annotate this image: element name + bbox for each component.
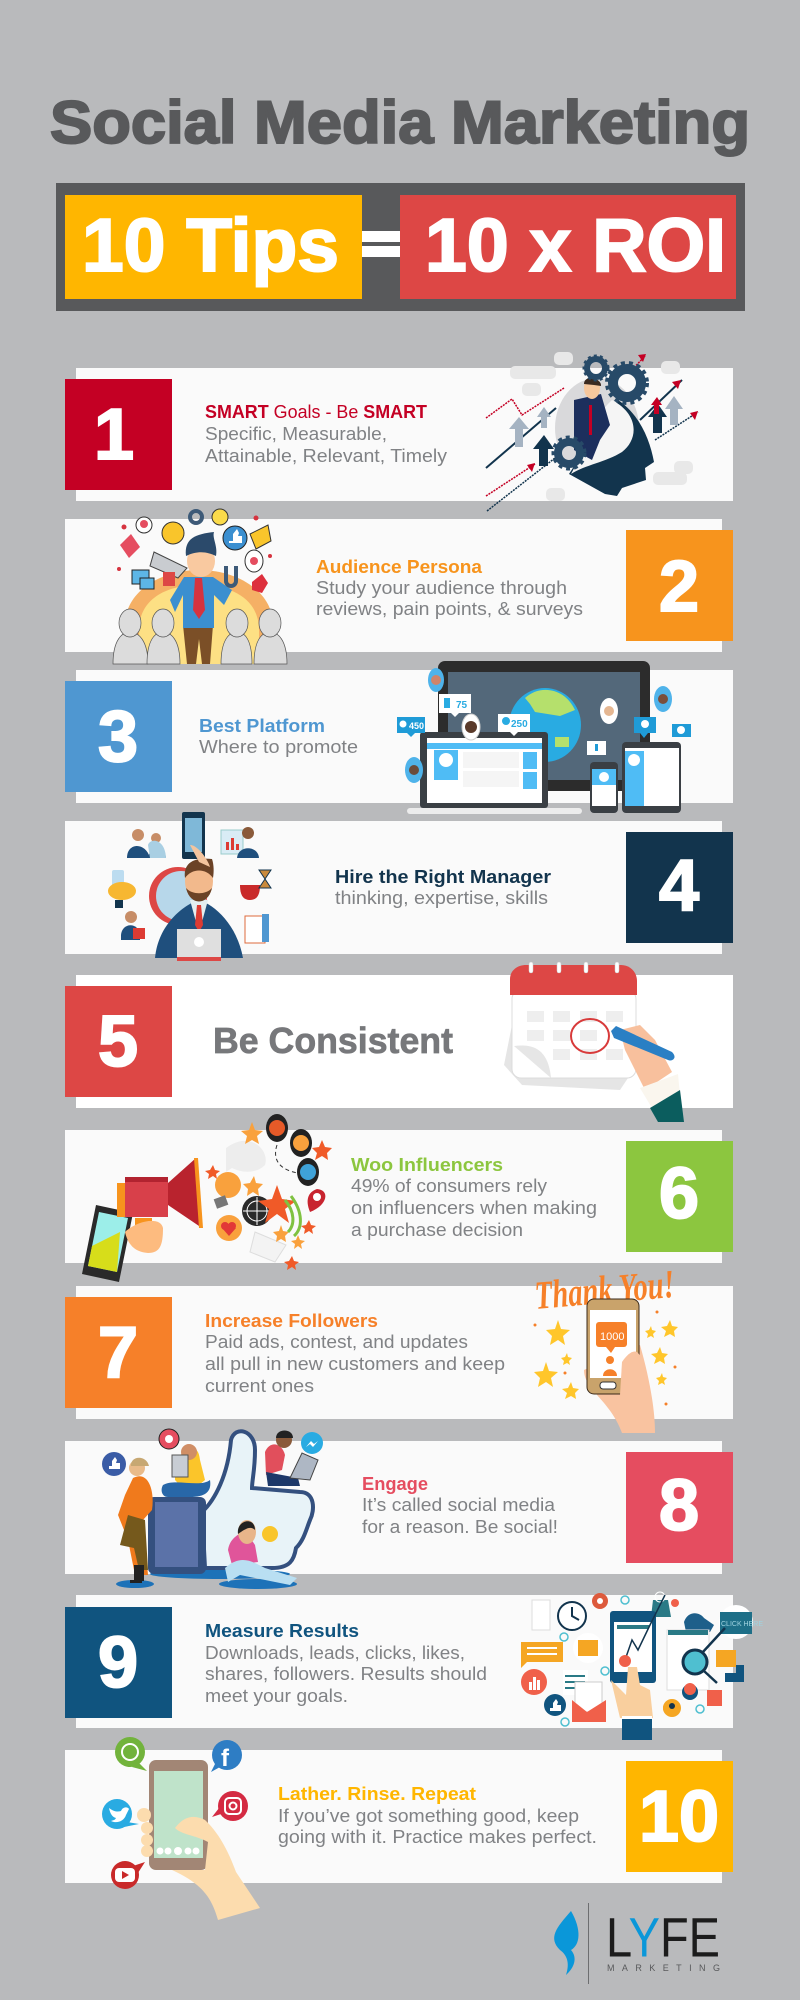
facebook bubble [211, 1740, 242, 1772]
equals sign [362, 231, 400, 257]
number 1: 1 [94, 395, 134, 475]
icon: hand holding phone, thank you: 1000 [600, 1331, 624, 1343]
tip 3 text [199, 716, 358, 757]
icon: hand holding phone, thank you [533, 1261, 678, 1433]
10 tips block: 10 Tips [82, 203, 339, 287]
10 x ROI block: 10 x ROI [425, 203, 726, 287]
tip 4 text: thinking, expertise, skills [335, 888, 548, 908]
number 9: 9 [98, 1623, 138, 1703]
tip 7 text: Paid ads, contest, and updates [205, 1332, 468, 1352]
number 3 [65, 681, 172, 792]
icon: thumbs up with people on phones [102, 1429, 323, 1589]
number 7: 7 [98, 1313, 138, 1393]
number 5: 5 [98, 1002, 138, 1082]
tip 2 text: reviews, pain points, & surveys [316, 599, 583, 619]
instagram bubble [212, 1791, 248, 1821]
number 10 [626, 1761, 733, 1872]
header equation banner [56, 183, 745, 311]
panel: tip 5 [65, 962, 733, 1122]
badge: 250 [498, 714, 530, 736]
icon: man with megaphone and audience [113, 509, 287, 664]
badge: 75: 75 [456, 700, 468, 711]
number 9 [65, 1607, 172, 1718]
tip 3 text: Where to promote [199, 737, 358, 757]
tip 7 text [205, 1311, 505, 1396]
tip 5 heading: Be Consistent [213, 1020, 453, 1061]
panel: tip 4 [65, 812, 733, 961]
logo wordmark: LYFE [606, 1906, 720, 1968]
panel: tip 1 [65, 352, 733, 511]
tip 1 text: Specific, Measurable, [205, 424, 387, 444]
tip 10 text: going with it. Practice makes perfect. [278, 1827, 597, 1847]
tip 6 text: Woo Influencers [351, 1155, 503, 1175]
tip 4 text: Hire the Right Manager [335, 867, 551, 887]
tip 7 text: Increase Followers [205, 1311, 378, 1331]
tip 3 text: Best Platform [199, 716, 325, 736]
thank you script: Thank You! [533, 1261, 676, 1318]
number 4: 4 [659, 846, 699, 926]
tip 10 text [278, 1784, 597, 1847]
icon: phone with analytics and marketing icons [521, 1592, 763, 1740]
tip 10 text: Lather. Rinse. Repeat [278, 1784, 476, 1804]
tip 1 text: Attainable, Relevant, Timely [205, 446, 447, 466]
tip 8 text: Engage [362, 1474, 428, 1494]
number 6 [626, 1141, 733, 1252]
number 1 [65, 379, 172, 490]
tip 6 text: 49% of consumers rely [351, 1176, 547, 1196]
number 4 [626, 832, 733, 943]
tip 7 text: current ones [205, 1376, 314, 1396]
number 2 [626, 530, 733, 641]
panel: tip 9 [65, 1592, 763, 1740]
tip 2 text: Audience Persona [316, 557, 483, 577]
tip 9 text: Measure Results [205, 1621, 359, 1641]
panel: tip 2 [65, 509, 733, 664]
number 3: 3 [98, 697, 138, 777]
tip 2 text: Study your audience through [316, 578, 567, 598]
icon: head with gears and arrows [486, 352, 698, 511]
badge: 450: 450 [409, 721, 424, 731]
twitter bubble [102, 1799, 139, 1829]
tip 6 text [351, 1155, 597, 1240]
panel: tip 3 [65, 661, 733, 814]
number 2: 2 [659, 547, 699, 627]
tip 9 text: Downloads, leads, clicks, likes, [205, 1643, 465, 1663]
tip 8 text: It’s called social media [362, 1495, 556, 1515]
icon: devices with globe and social badges [397, 661, 691, 814]
tip 4 text [335, 867, 551, 908]
tip 8 text [362, 1474, 558, 1537]
logo wordmark: MARKETING [607, 1963, 720, 1973]
icon: hand holding phone with social bubbles [102, 1737, 260, 1920]
number 8: 8 [659, 1466, 699, 1546]
tip 9 text: shares, followers. Results should [205, 1664, 487, 1684]
badge: 250: 250 [511, 719, 528, 730]
panel: tip 8 [65, 1429, 733, 1589]
badge: 450 [397, 717, 425, 737]
tip 6 text: a purchase decision [351, 1220, 523, 1240]
title: Social Media Marketing [50, 89, 750, 156]
tip 10 text: If you’ve got something good, keep [278, 1806, 579, 1826]
logo: LYFE Marketing [554, 1903, 720, 1984]
10 tips block [65, 195, 362, 299]
tip 1 text: SMART Goals - Be SMART [205, 402, 427, 422]
tip 9 text: meet your goals. [205, 1686, 348, 1706]
facebook bubble: f [221, 1745, 230, 1772]
icon: phone with analytics and marketing icons: CLICK HERE [721, 1621, 763, 1628]
tip 2 text [316, 557, 583, 619]
panel: tip 7 [65, 1261, 733, 1433]
whatsapp bubble [115, 1737, 147, 1771]
number 10: 10 [639, 1777, 719, 1857]
panel: tip 10 [65, 1737, 733, 1920]
tip 9 text [205, 1621, 487, 1706]
number 8 [626, 1452, 733, 1563]
youtube bubble [111, 1861, 145, 1889]
tip 6 text: on influencers when making [351, 1198, 597, 1218]
number 6: 6 [659, 1154, 699, 1234]
tip 8 text: for a reason. Be social! [362, 1517, 558, 1537]
icon: manager with clock and task vignettes [108, 812, 271, 961]
badge: 75 [439, 694, 471, 717]
icon: phone megaphone with influencer icons [82, 1114, 332, 1282]
panel: tip 6 [65, 1114, 733, 1282]
number 7 [65, 1297, 172, 1408]
number 5 [65, 986, 172, 1097]
icon: calendar and hand with marker [504, 962, 684, 1122]
tip 7 text: all pull in new customers and keep [205, 1354, 505, 1374]
icon: blue flame [554, 1911, 579, 1975]
tip 1 text [205, 402, 447, 466]
